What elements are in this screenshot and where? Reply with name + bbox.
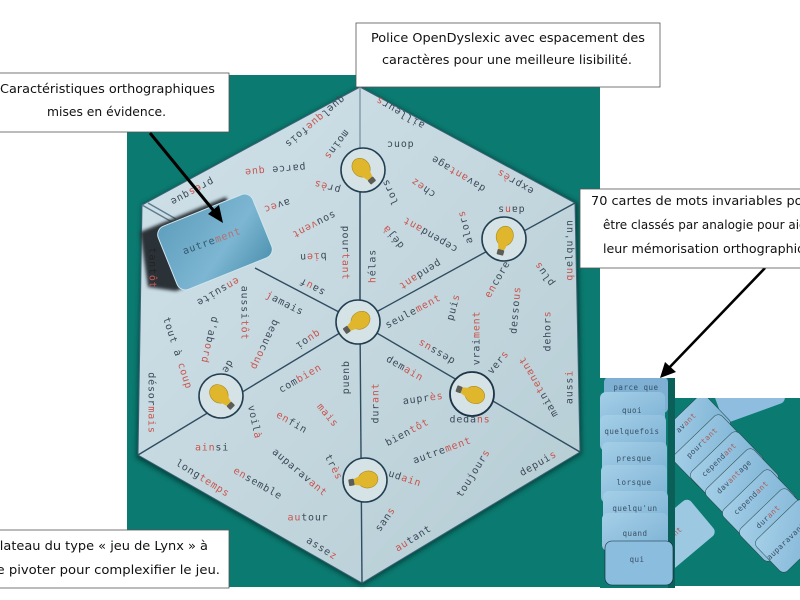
words: upper-right sector: hélas — [366, 249, 378, 283]
photo: stack of word cards — [600, 377, 675, 588]
lightbulb token: bottom — [343, 458, 387, 502]
words: right sector: plus — [532, 259, 557, 288]
words: lower-right sector: udain — [387, 468, 423, 489]
card stack words: lorsque — [616, 478, 652, 487]
words: left sector: d'abord — [198, 315, 220, 364]
words: upper-right sector: chez — [409, 175, 438, 200]
words: lower-left sector: ainsi — [195, 442, 229, 454]
teal background of the game board photo — [127, 75, 600, 587]
fan card words: avant — [674, 411, 698, 435]
words: upper-left sector: jamais — [264, 290, 305, 318]
lightbulb token: centre — [336, 300, 380, 344]
words: right sector: seulement — [384, 293, 443, 331]
words: lower-right sector — [370, 354, 559, 554]
words: lower-left sector: assez — [304, 535, 339, 563]
words: right sector: puis — [445, 293, 463, 322]
words: lower-left sector: enfin — [274, 410, 309, 436]
words: upper-left sector — [168, 93, 351, 318]
words: upper-left sector: presque — [168, 175, 215, 207]
words: lower-right sector: autrement — [412, 435, 473, 467]
card stack words: quoi — [622, 406, 642, 415]
words: right sector: aussi — [564, 370, 576, 404]
fan card words — [675, 398, 800, 572]
lightbulb token: left — [199, 374, 243, 418]
words: upper-left sector: souvent — [290, 208, 337, 240]
words: lower-left sector: voilà — [245, 404, 264, 440]
word card on the board: autrement: autrement — [181, 226, 243, 257]
words: lower-left sector: très — [322, 452, 345, 482]
words: upper-left sector: quelquefois — [282, 93, 347, 150]
words: lower-right sector: demain — [384, 354, 425, 384]
words: left sector: beaucoup — [248, 318, 281, 372]
words: right sector: dessous — [508, 286, 524, 334]
words: upper-right sector — [366, 94, 536, 291]
callout: orthographic features: Caractéristiques orthographiques — [0, 81, 215, 96]
card stack words: quand — [622, 529, 648, 538]
callout: OpenDyslexic font: caractères pour une meilleure lisibilité. — [382, 52, 632, 67]
lightbulb token: right — [450, 372, 494, 416]
callout: OpenDyslexic font: Police OpenDyslexic avec espacement des — [371, 30, 645, 45]
words: upper-right sector: exprès — [495, 166, 536, 197]
words: upper-right sector: ailleurs — [374, 94, 427, 131]
words: lower-right sector: depuis — [518, 449, 559, 479]
words: right sector: dessus — [416, 336, 457, 366]
words: upper-right sector: davantage — [429, 153, 488, 194]
card stack words — [600, 377, 673, 585]
fan card words: davantage — [715, 458, 753, 496]
words: right sector: vers — [486, 349, 512, 377]
words: lower-left sector: auparavant — [270, 447, 329, 499]
words: lower-right sector: toujours — [455, 447, 493, 500]
words: lower-left sector: combien — [277, 362, 324, 396]
card stack words: presque — [616, 454, 652, 463]
words: upper-right sector: donc — [386, 138, 414, 150]
arrow to the highlighted card — [150, 133, 223, 223]
words: right sector: dehors — [542, 311, 554, 351]
fan card words: pourtant — [684, 426, 720, 460]
board dividing lines — [138, 87, 580, 583]
fan card words: cependant — [732, 479, 770, 517]
callout: 70 word cards — [580, 189, 800, 268]
words: upper-right sector: pendant — [396, 257, 443, 291]
words: left sector: désor mais — [146, 372, 158, 434]
words: right sector — [384, 219, 576, 419]
callout: orthographic features: mises en évidence. — [47, 104, 166, 119]
hexagonal game board — [136, 87, 582, 586]
arrow to the word cards — [660, 268, 765, 378]
words: lower-right sector: durant — [370, 383, 382, 423]
words: lower-left sector: quand — [340, 361, 352, 395]
words: lower-right sector: autant — [393, 523, 434, 554]
photo: fanned word cards — [675, 398, 800, 586]
words: lower-left sector: ensemble — [231, 465, 284, 502]
words: upper-right sector: dans — [497, 204, 525, 214]
words: upper-left sector: sauf — [298, 275, 327, 297]
partly hidden card: ant — [667, 525, 684, 541]
words: upper-left sector: pour tant — [340, 226, 350, 280]
words: upper-left sector: près — [312, 177, 342, 196]
lightbulb token: top — [341, 148, 385, 192]
words: upper-right sector: cependant — [401, 214, 460, 254]
words: left sector: tout à coup — [160, 316, 195, 391]
words: upper-left sector: parce que — [244, 161, 306, 177]
words: lower-left sector: longtemps — [174, 458, 231, 500]
words: upper-right sector: alors — [456, 209, 476, 245]
words: lower-right sector: bientôt — [383, 416, 431, 449]
card stack words: quelquefois — [604, 427, 660, 436]
callout: OpenDyslexic font — [356, 23, 660, 87]
lightbulb token: upper right — [482, 217, 526, 261]
words: lower-left sector — [174, 361, 352, 563]
callout: Lynx-type board — [0, 530, 229, 588]
partly hidden card — [675, 500, 715, 568]
words: lower-left sector: autour — [288, 512, 328, 524]
word tantôt beside the card: tant ôt — [146, 248, 158, 288]
words: left sector: ensuite — [194, 274, 241, 308]
word card on the board: autrement — [140, 191, 275, 293]
words: left sector: quoi — [293, 327, 322, 351]
words: lower-left sector: mais — [314, 402, 340, 430]
words: lower-right sector: auprès — [402, 390, 444, 407]
words: left sector — [146, 274, 322, 434]
card stack words: parce que — [613, 383, 659, 392]
words: upper-left sector: bien — [299, 250, 327, 262]
words: upper-right sector: lors — [380, 177, 402, 206]
words: upper-right sector: déjà — [380, 222, 407, 251]
words: right sector: vraiment — [472, 311, 482, 365]
card stack words: qui — [629, 555, 645, 564]
words: upper-left sector: moins — [322, 127, 351, 161]
callout: orthographic features — [0, 73, 229, 132]
words: right sector: encore — [483, 259, 513, 300]
words: right sector: quelqu'un — [564, 219, 576, 281]
fan card words: cependant — [700, 441, 738, 479]
words: right sector: maintenant — [517, 354, 561, 419]
card stack words: quelqu'un — [612, 504, 658, 513]
words: lower-right sector: sans — [373, 505, 398, 534]
words: upper-left sector: avec — [262, 196, 291, 214]
fan card words: durant — [754, 503, 782, 530]
words: left sector: de — [219, 358, 235, 375]
words: lower-right sector: dedans — [450, 414, 490, 426]
words: left sector: aussi tôt — [238, 286, 250, 340]
